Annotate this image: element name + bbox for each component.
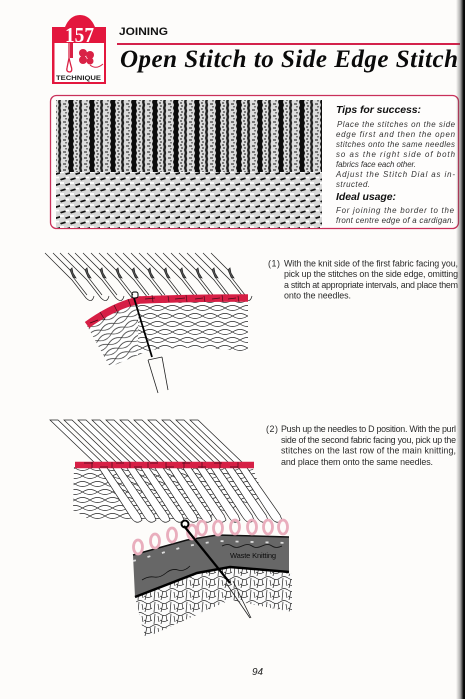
needles <box>45 253 252 301</box>
header rule <box>117 43 460 45</box>
ideal usage text: front centre edge of a cardigan. <box>336 216 454 225</box>
step 1 text: a stitch at appropriate intervals, and place them <box>284 280 458 290</box>
step 2 text: (2) <box>266 424 278 434</box>
section label: JOINING <box>119 26 168 38</box>
icon: needle and clover <box>67 43 103 72</box>
lower knitted fabric <box>135 567 292 638</box>
needles <box>50 420 282 522</box>
step 2 text <box>266 424 456 467</box>
transfer tool <box>132 292 168 393</box>
step 2 text: side of the second fabric facing you, pick up the <box>281 435 456 445</box>
red edge stitches <box>75 462 254 468</box>
step 2 text: Push up the needles to D position. With the purl <box>281 424 456 434</box>
step 2 text: stitches on the last row of the main knitting, <box>281 446 456 456</box>
book spine shadow <box>456 0 465 699</box>
ideal usage text: For joining the border to the <box>336 206 455 215</box>
step 1 text: With the knit side of the first fabric facing you, <box>284 258 458 268</box>
pink stitch loops <box>134 520 288 554</box>
knitted fabric <box>86 299 248 367</box>
waste knitting label: Waste Knitting <box>230 551 276 560</box>
badge number: 157 <box>65 23 94 47</box>
step 1 text: (1) <box>268 258 280 268</box>
tips text: Place the stitches on the side <box>337 120 456 129</box>
diagram 2: picking up open stitches <box>50 420 292 638</box>
step 1 text: onto the needles. <box>284 290 351 300</box>
step 2 text: and place them onto the same needles. <box>281 457 433 467</box>
diagram 1: picking up side edge stitches <box>45 253 252 393</box>
tips text <box>335 120 456 189</box>
ideal usage heading: Ideal usage: <box>336 191 396 203</box>
step 1 text: pick up the stitches on the side edge, omitting <box>284 269 458 279</box>
photo: knitted sample <box>56 100 322 228</box>
step 1 text <box>268 258 458 300</box>
tips text: structed. <box>336 180 370 189</box>
technique badge <box>52 15 106 84</box>
tips text: fabrics face each other. <box>336 160 416 169</box>
red edge stitches <box>87 295 248 325</box>
upper fabric <box>73 466 264 520</box>
tips text: stitches onto the same needles <box>336 140 455 149</box>
ideal usage text <box>336 206 455 225</box>
tips text: edge first and then the open <box>336 130 456 139</box>
tips heading: Tips for success: <box>336 104 421 116</box>
waste knitting band <box>133 535 289 597</box>
panel: tips and photo <box>50 96 458 228</box>
tips text: so as the right side of both <box>336 150 456 159</box>
title: Open Stitch to Side Edge Stitch <box>120 46 458 73</box>
tips text: Adjust the Stitch Dial as in- <box>335 170 455 179</box>
transfer tool <box>182 520 251 618</box>
page number: 94 <box>252 667 264 678</box>
badge label: TECHNIQUE <box>56 75 102 82</box>
